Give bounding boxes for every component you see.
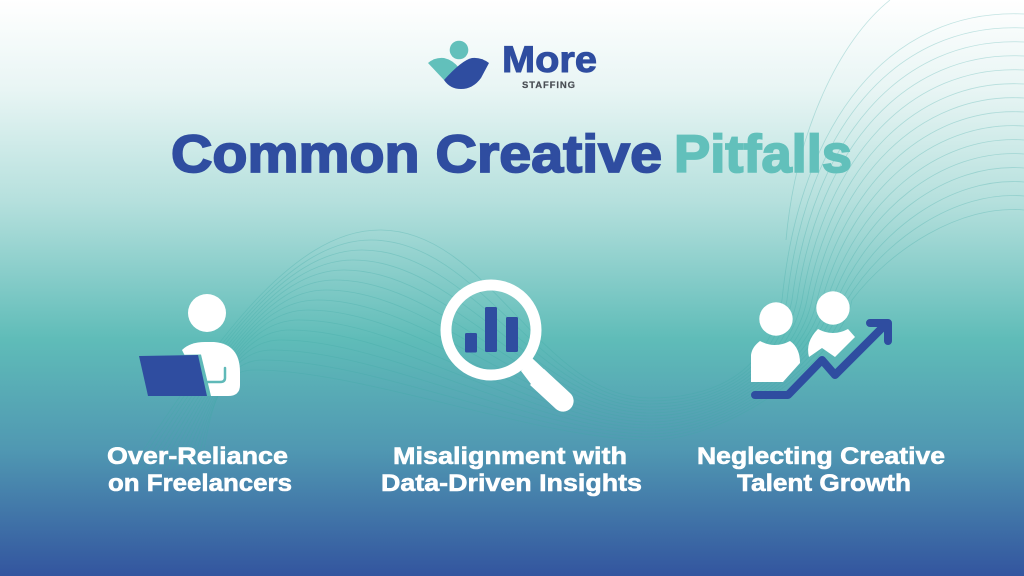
logo xyxy=(428,39,597,91)
caption: over-reliance: on Freelancers xyxy=(108,470,292,497)
logo wordmark: More xyxy=(502,39,597,80)
title: Common Creative xyxy=(171,125,662,184)
icon: talent growth xyxy=(751,291,888,395)
caption: misalignment xyxy=(381,443,642,497)
caption: neglecting talent growth: Neglecting Creative xyxy=(697,443,945,470)
background wave lines xyxy=(130,0,1024,470)
caption: over-reliance: Over-Reliance xyxy=(107,443,288,470)
title: Pitfalls xyxy=(674,125,852,184)
logo subtitle: STAFFING xyxy=(522,80,575,91)
caption: neglecting talent growth: Talent Growth xyxy=(737,470,911,497)
logo mark xyxy=(428,41,489,89)
icon: freelancer at laptop xyxy=(139,294,240,396)
icon: magnifying glass with bars xyxy=(446,285,574,412)
caption: over-reliance xyxy=(107,443,292,497)
caption: misalignment: Data-Driven Insights xyxy=(381,470,642,497)
caption: misalignment: Misalignment with xyxy=(393,443,627,470)
caption: neglecting talent growth xyxy=(697,443,945,497)
title xyxy=(171,125,852,184)
